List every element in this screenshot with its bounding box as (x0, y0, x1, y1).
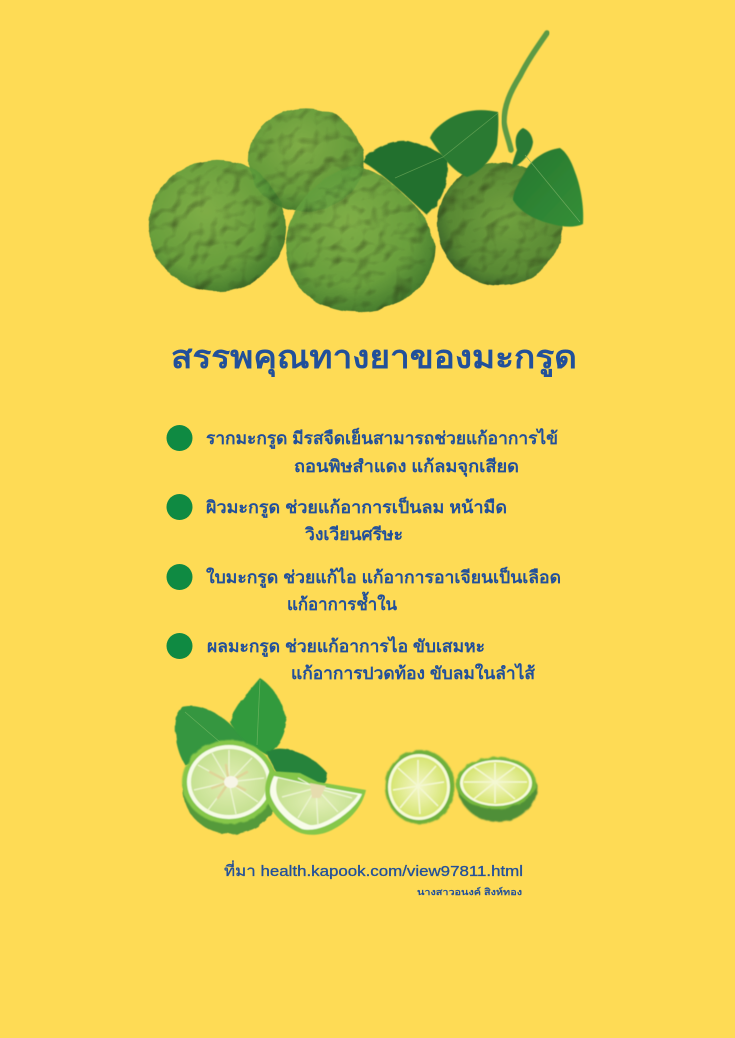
kaffir lime: front centre (285, 165, 436, 312)
leaf: top (230, 678, 286, 755)
half lime: rind body (183, 746, 279, 834)
leaf: left (175, 706, 258, 765)
rind ring (182, 740, 276, 824)
bullet (166, 494, 192, 520)
rim (385, 750, 455, 824)
text: fruit line 2: แก้อาการปวดท้อง ขับลมในลำไส้ (291, 663, 536, 683)
bullet (166, 633, 192, 659)
item: fruit (166, 633, 536, 683)
item: peel (166, 494, 507, 544)
leaf vein lines (395, 113, 498, 178)
leaf vein (185, 680, 260, 755)
text: root line 2: ถอนพิษสำแดง แก้ลมจุกเสียด (294, 456, 519, 477)
text: peel line 2: วิงเวียนศรีษะ (305, 524, 403, 544)
pith (187, 745, 271, 819)
leaf: right front (513, 148, 583, 227)
half: right dome (456, 757, 537, 822)
pulp (463, 762, 529, 804)
rim (456, 757, 536, 809)
pulp (391, 757, 447, 817)
text: root line 1: รากมะกรูด มีรสจืดเย็นสามารถช่วยแก้อาการไข้ (206, 426, 558, 450)
half lime: cut face (182, 740, 276, 824)
benefits list (166, 425, 561, 683)
segment lines (194, 750, 264, 814)
pulp (191, 749, 267, 815)
source line: ที่มา health.kapook.com/view97811.html (224, 860, 523, 880)
item: root (166, 425, 558, 477)
text: peel line 1: ผิวมะกรูด ช่วยแก้อาการเป็นลม หน้ามืด (206, 495, 507, 519)
pith (460, 760, 532, 806)
photo: cut kaffir lime with leaves (175, 678, 366, 835)
wedge pith (270, 776, 362, 830)
bullet (166, 425, 192, 451)
text: leaf line 1: ใบมะกรูด ช่วยแก้ไอ แก้อาการอาเจียนเป็นเลือด (206, 565, 561, 589)
text: fruit line 1: ผลมะกรูด ช่วยแก้อาการไอ ขับเสมหะ (207, 636, 485, 658)
wedge rind (265, 771, 366, 835)
author credit: นางสาวอนงค์ สิงห์ทอง (417, 886, 522, 897)
wedge segments (282, 778, 352, 825)
title: สรรพคุณทางยาของมะกรูด (171, 339, 577, 378)
segment lines (393, 760, 444, 814)
leaf: lower right (266, 749, 327, 786)
photo: two lime halves (385, 750, 537, 824)
segment lines (464, 763, 527, 803)
leaf: small (512, 128, 533, 168)
half: left disc (385, 750, 455, 824)
photo: kaffir limes with stem and leaves (148, 33, 583, 312)
wedge core (310, 783, 326, 798)
pith (388, 754, 450, 820)
body (457, 774, 537, 822)
leaf vein (525, 155, 580, 222)
bullet (166, 564, 192, 590)
kaffir lime: top back (248, 108, 364, 212)
stem (504, 33, 547, 150)
wedge pulp (276, 778, 358, 825)
text: leaf line 2: แก้อาการช้ำใน (287, 591, 397, 614)
kaffir lime: left (148, 160, 286, 292)
seeds (210, 765, 247, 798)
item: leaf (166, 564, 561, 614)
leaf: centre behind fruit (362, 141, 447, 215)
core (224, 776, 238, 788)
wedge (265, 771, 366, 835)
kaffir lime: right (437, 162, 563, 286)
leaf: upper stem leaf (430, 110, 498, 177)
